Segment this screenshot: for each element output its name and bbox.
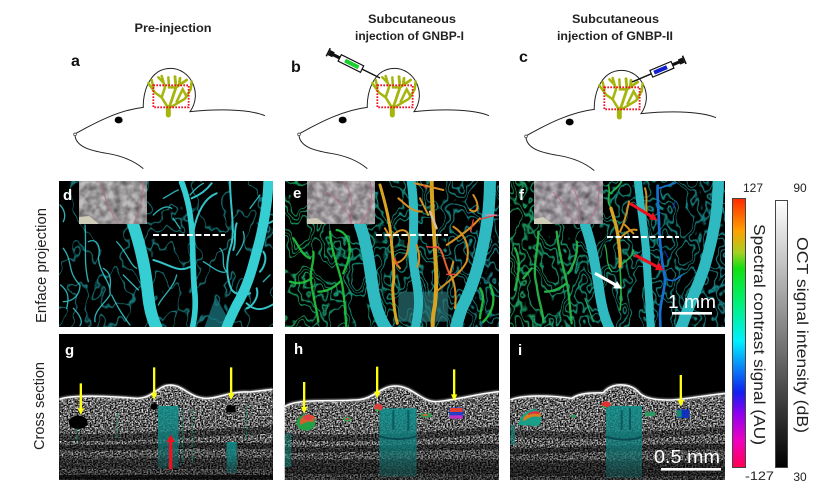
heading: pre-injection: Pre-injection bbox=[134, 23, 212, 35]
heading: GNBP-I: injection of GNBP-I bbox=[355, 31, 464, 43]
yellow arrows h bbox=[301, 367, 457, 414]
panel c: mouse with GNBP-II: c bbox=[519, 49, 528, 66]
icon: blue syringe bbox=[630, 55, 687, 86]
inset photo f bbox=[534, 181, 603, 224]
label h: h bbox=[294, 341, 303, 358]
inset photo d bbox=[79, 181, 147, 224]
yellow arrow i bbox=[678, 375, 684, 407]
inset photo e bbox=[307, 181, 375, 224]
panel a: mouse pre-injection bbox=[71, 53, 265, 169]
colorbar: OCT intensity: 30 bbox=[793, 470, 807, 484]
heading: GNBP-I bbox=[355, 14, 464, 43]
panel b: mouse with GNBP-I bbox=[291, 48, 489, 169]
panel d: enface pre-injection bbox=[59, 178, 275, 332]
label d: d bbox=[63, 187, 72, 204]
colorbar: spectral contrast: 127 bbox=[743, 181, 763, 195]
dashed line d bbox=[153, 234, 225, 236]
icon: green syringe bbox=[326, 48, 382, 82]
row label: enface projection: Enface projection bbox=[33, 208, 50, 323]
scale bar f bbox=[669, 295, 715, 315]
label i: i bbox=[518, 342, 522, 359]
panel b: mouse with GNBP-I: b bbox=[291, 59, 301, 76]
heading: GNBP-II: injection of GNBP-II bbox=[557, 31, 673, 43]
scale bar i: 0.5 mm bbox=[654, 447, 720, 467]
red arrow g bbox=[166, 435, 175, 469]
colorbar: OCT intensity: OCT signal intensity (dB) bbox=[793, 237, 810, 433]
label g: g bbox=[65, 342, 74, 359]
panel h: cross section GNBP-I bbox=[285, 334, 499, 480]
panel f: enface GNBP-II bbox=[510, 178, 725, 332]
panel c: mouse with GNBP-II bbox=[519, 49, 716, 171]
heading: GNBP-II: Subcutaneous bbox=[572, 14, 659, 26]
colorbar: spectral contrast: Spectral contrast signal (AU) bbox=[750, 224, 767, 445]
label e: e bbox=[293, 185, 301, 202]
colorbar: spectral contrast: -127 bbox=[745, 469, 774, 483]
panel a: mouse pre-injection: a bbox=[71, 53, 80, 70]
colorbar: OCT intensity bbox=[776, 181, 810, 484]
colorbar: spectral contrast bbox=[732, 181, 774, 483]
colorbar: OCT intensity: 90 bbox=[793, 181, 807, 195]
red arrows f bbox=[630, 203, 664, 270]
white arrow f bbox=[595, 273, 622, 289]
scale bar f: 1 mm bbox=[668, 292, 716, 312]
row label: cross section: Cross section bbox=[31, 362, 48, 450]
panel g: cross section pre-injection bbox=[59, 334, 273, 480]
dashed line e bbox=[376, 234, 448, 236]
heading: GNBP-II bbox=[557, 14, 673, 43]
yellow arrows g bbox=[78, 367, 234, 415]
dashed line f bbox=[607, 236, 679, 238]
panel e: enface GNBP-I bbox=[285, 178, 499, 332]
panel i: cross section GNBP-II bbox=[510, 334, 725, 480]
label f: f bbox=[519, 187, 525, 204]
heading: GNBP-I: Subcutaneous bbox=[368, 14, 456, 26]
